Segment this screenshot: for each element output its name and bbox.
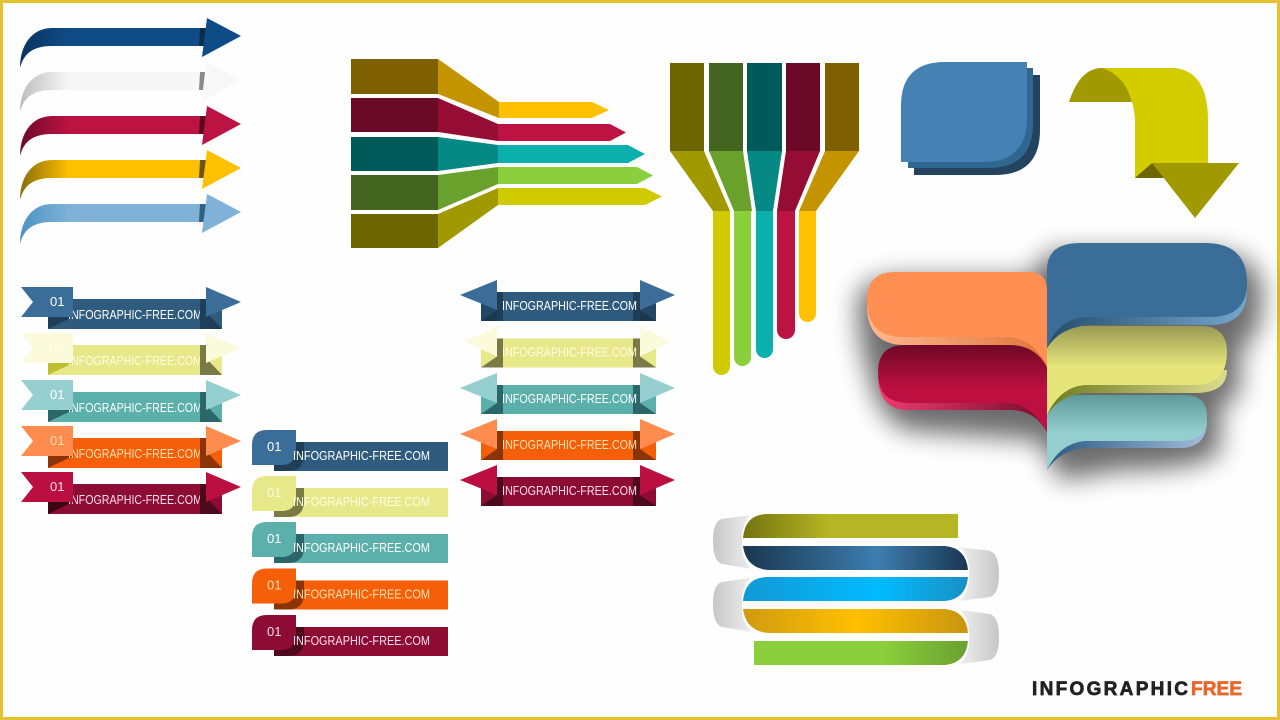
tag: pale yellow: INFOGRAPHIC-FREE.COM — [293, 494, 430, 509]
tag: teal: 01 — [267, 531, 281, 546]
ribbon: crimson: 01 — [50, 479, 64, 494]
banner: pale yellow: INFOGRAPHIC-FREE.COM — [502, 344, 637, 360]
funnel row: crimson — [351, 98, 626, 141]
bar: green — [754, 641, 968, 665]
banner: teal: INFOGRAPHIC-FREE.COM — [502, 391, 637, 406]
tag: orange — [252, 568, 448, 610]
ribbon: orange: 01 — [50, 433, 64, 448]
vertical funnel diagram — [670, 63, 859, 375]
tag: crimson: INFOGRAPHIC-FREE.COM — [293, 633, 430, 648]
horizontal funnel diagram — [351, 59, 662, 248]
tag: crimson — [252, 615, 448, 656]
stacked ribbon bars — [713, 514, 999, 665]
funnel row: teal — [351, 137, 645, 171]
tag: orange: INFOGRAPHIC-FREE.COM — [293, 586, 430, 602]
ribbon: teal — [21, 380, 241, 422]
left ribbon list — [21, 287, 241, 514]
arrow: amber — [20, 150, 241, 200]
ribbon: teal: INFOGRAPHIC-FREE.COM — [68, 400, 202, 415]
bar: sky blue — [743, 577, 968, 601]
funnel column: amber — [799, 63, 859, 322]
banner: orange: INFOGRAPHIC-FREE.COM — [502, 437, 637, 452]
banner: blue: INFOGRAPHIC-FREE.COM — [502, 298, 637, 313]
banner: teal — [460, 373, 675, 414]
connectors: grey folds — [713, 515, 999, 664]
arrow: light blue — [20, 194, 241, 244]
ribbon: orange — [21, 426, 241, 468]
tag: crimson: 01 — [267, 624, 281, 639]
arrow: white — [20, 62, 241, 112]
logo: FREE — [1191, 679, 1242, 700]
speech bubble cluster — [858, 243, 1262, 480]
ribbon: crimson — [21, 472, 241, 514]
bar: navy — [743, 546, 968, 570]
bubble: teal — [1047, 395, 1207, 470]
ribbon: pale yellow — [21, 333, 241, 375]
ribbon: crimson: INFOGRAPHIC-FREE.COM — [68, 492, 202, 507]
tag: teal: INFOGRAPHIC-FREE.COM — [293, 540, 430, 555]
arrow: navy — [20, 18, 241, 68]
logo: INFOGRAPHIC — [1032, 679, 1188, 700]
tag: orange: 01 — [267, 578, 281, 592]
banner: crimson: INFOGRAPHIC-FREE.COM — [502, 483, 637, 498]
banner: blue — [460, 280, 675, 321]
ribbon: pale yellow: INFOGRAPHIC-FREE.COM — [68, 353, 202, 368]
ribbon: teal: 01 — [50, 387, 64, 402]
tag: pale yellow — [252, 476, 448, 517]
ribbon: pale yellow: 01 — [50, 340, 64, 355]
tag: pale yellow: 01 — [267, 485, 281, 500]
ribbon: blue: INFOGRAPHIC-FREE.COM — [68, 307, 202, 322]
ribbon: blue — [21, 287, 241, 329]
layered blue leaf shape — [901, 62, 1040, 175]
bubble: blue — [1047, 243, 1247, 348]
bubble: yellow — [1047, 326, 1227, 415]
yellow folded arrow — [1069, 68, 1239, 218]
tag: blue — [252, 430, 448, 471]
bubble: orange — [867, 272, 1047, 367]
curved arrows group — [20, 18, 241, 244]
funnel column: teal — [747, 63, 782, 358]
funnel column: green — [709, 63, 752, 366]
double-arrow ribbon list — [460, 280, 675, 506]
banner: orange — [460, 419, 675, 460]
banner: pale yellow — [464, 326, 671, 368]
funnel row: olive — [351, 188, 662, 248]
funnel column: crimson — [777, 63, 820, 339]
funnel row: amber — [351, 59, 609, 118]
tag: blue: INFOGRAPHIC-FREE.COM — [293, 448, 430, 463]
tag: teal — [252, 522, 448, 563]
rounded tag list — [252, 430, 448, 656]
bubble: crimson — [878, 345, 1047, 432]
ribbon: orange: INFOGRAPHIC-FREE.COM — [68, 446, 202, 461]
bar: amber — [743, 609, 968, 633]
banner: crimson — [460, 465, 675, 506]
bar: olive — [743, 514, 958, 538]
tag: blue: 01 — [267, 439, 281, 454]
arrow: crimson — [20, 106, 241, 156]
funnel column: olive — [670, 63, 730, 375]
ribbon: blue: 01 — [50, 294, 64, 309]
funnel row: green — [351, 167, 653, 210]
